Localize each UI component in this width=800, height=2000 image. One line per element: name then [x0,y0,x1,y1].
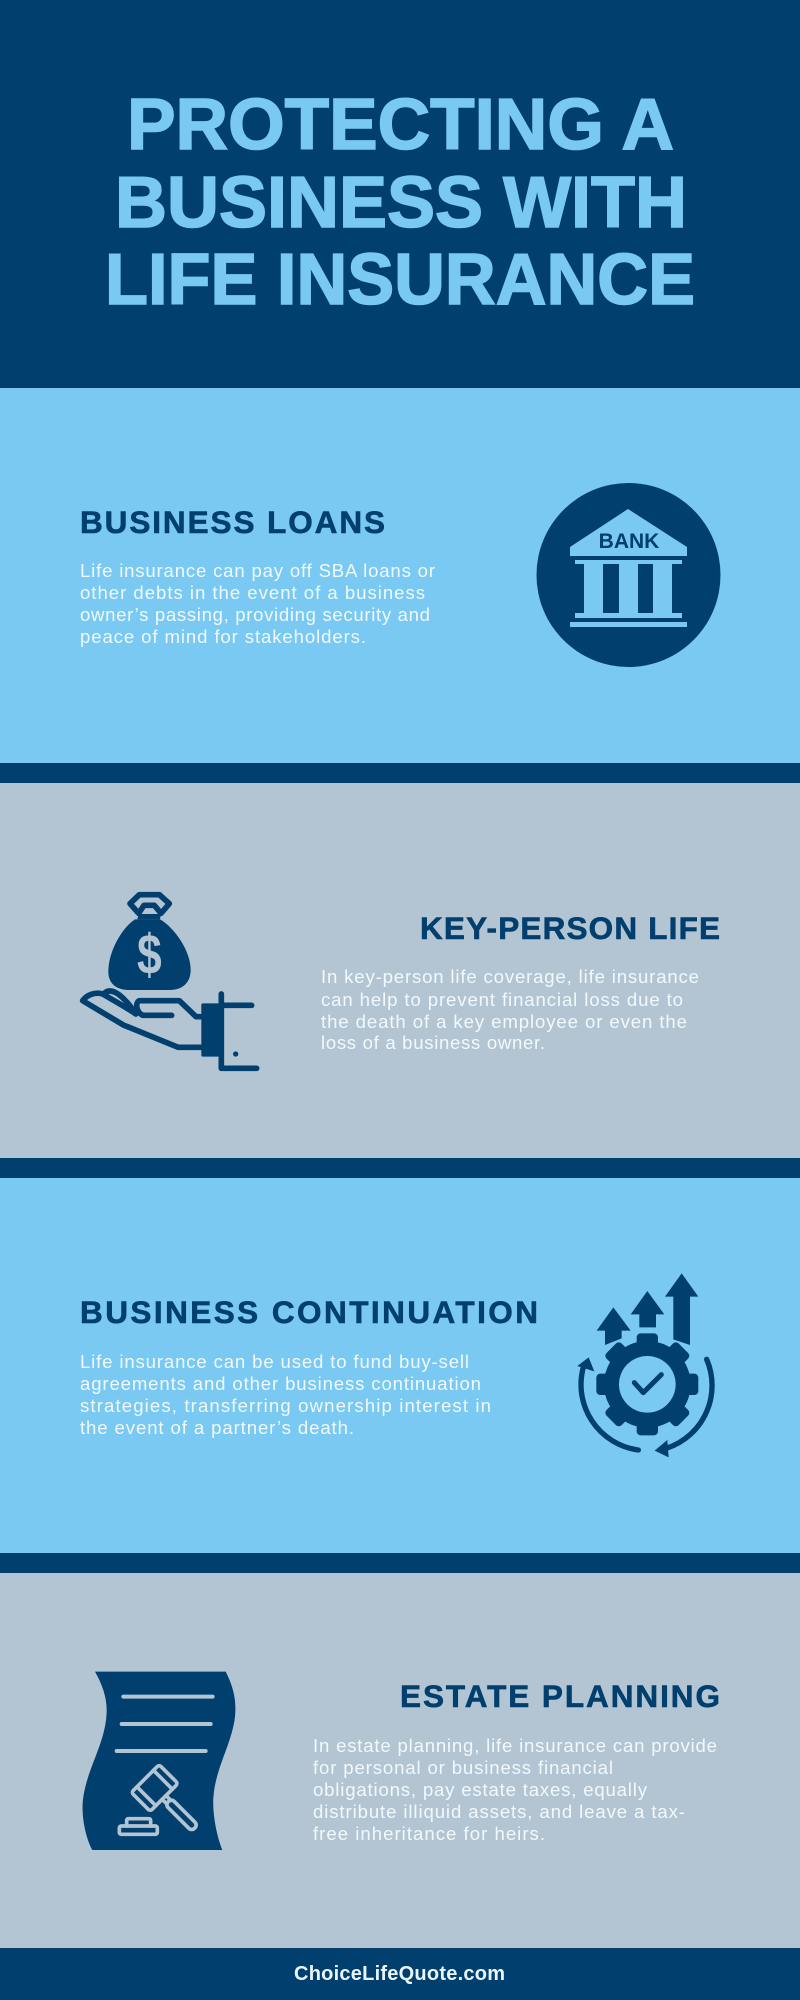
heading: business continuation: BUSINESS CONTINUATION [80,1294,538,1330]
text block: key-person life: In key-person life coverage, life insurance [321,966,699,987]
text block: business loans [80,560,435,647]
icon: bank [536,483,720,667]
panel: business continuation [0,1178,800,1553]
title [105,85,695,320]
footer: website: ChoiceLifeQuote.com [294,1963,505,1985]
icon: bank: BANK [599,530,659,553]
panel: estate planning [0,1573,800,1948]
text block: estate planning: free inheritance for heirs. [313,1823,545,1844]
text block: estate planning: distribute illiquid assets, and leave a tax- [313,1801,685,1822]
text block: business continuation: agreements and other business continuation [80,1373,481,1394]
text block: key-person life: loss of a business owner. [321,1032,545,1053]
text block: estate planning: for personal or business financial [313,1757,613,1778]
text block: business loans: Life insurance can pay off SBA loans or [80,560,435,581]
text block: business loans: peace of mind for stakeholders. [80,626,366,647]
title: LIFE INSURANCE [105,240,695,320]
text block: business loans: owner’s passing, providing security and [80,604,430,625]
text block: key-person life: can help to prevent financial loss due to [321,989,683,1010]
heading: business loans: BUSINESS LOANS [80,504,385,540]
text block: business continuation: strategies, transferring ownership interest in [80,1395,491,1416]
icon: legal document with gavel [83,1672,235,1850]
text block: business continuation: the event of a partner’s death. [80,1417,354,1438]
text block: business continuation [80,1351,491,1438]
text block: business loans: other debts in the event of a business [80,582,425,603]
panel: key-person life [0,783,800,1158]
heading: key-person life: KEY-PERSON LIFE [420,910,720,946]
icon: money bag on hand: $ [137,924,162,987]
text block: estate planning: In estate planning, life insurance can provide [313,1735,717,1756]
heading: estate planning: ESTATE PLANNING [400,1678,720,1714]
text block: key-person life [321,966,699,1053]
text block: estate planning: obligations, pay estate taxes, equally [313,1779,648,1800]
text block: business continuation: Life insurance can be used to fund buy-sell [80,1351,469,1372]
icon: gear with growth arrows [577,1273,712,1457]
panel: business loans [0,388,800,763]
text block: key-person life: the death of a key employee or even the [321,1011,687,1032]
title: BUSINESS WITH [115,163,687,243]
icon: money bag on hand [83,895,257,1068]
text block: estate planning [313,1735,717,1844]
title: PROTECTING A [127,85,674,165]
